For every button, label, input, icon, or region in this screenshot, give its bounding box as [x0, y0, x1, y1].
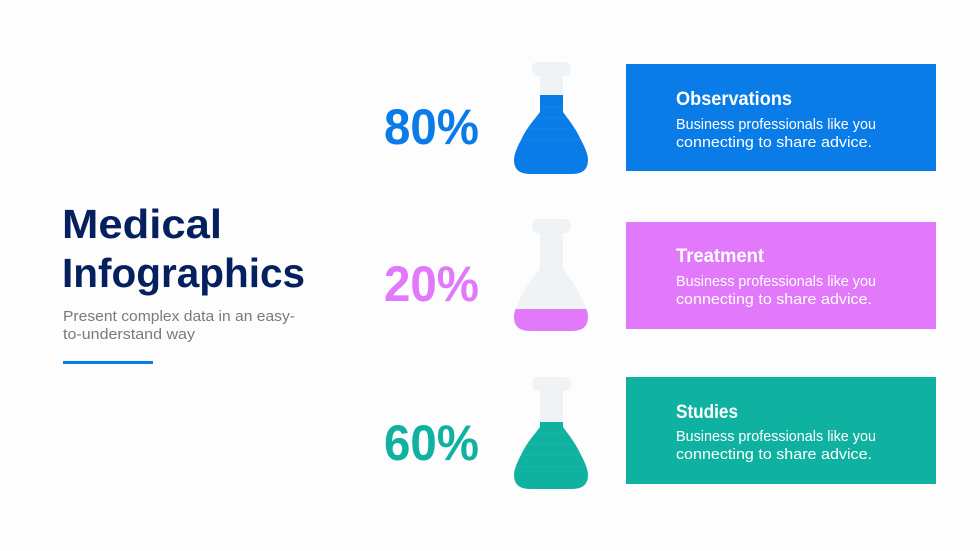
- card body: Business professionals like you: [676, 429, 876, 445]
- icon: blue flask 80%: [514, 62, 588, 174]
- heading: Medical Infographics: Medical: [62, 201, 222, 247]
- subtitle text: Present complex data in an easy-: [63, 308, 295, 325]
- card body: [676, 117, 876, 151]
- card body: [676, 274, 876, 308]
- accent underline: [63, 361, 153, 364]
- panel: Observations: [626, 64, 936, 171]
- subtitle text: [63, 308, 295, 343]
- card body: Business professionals like you: [676, 274, 876, 290]
- card body: connecting to share advice.: [676, 292, 872, 308]
- card title: Treatment: [676, 246, 765, 267]
- heading: Medical Infographics: [62, 201, 305, 296]
- panel: Treatment: [626, 222, 936, 329]
- icon: teal flask 60%: [514, 377, 588, 489]
- percentage: 20%: 20%: [384, 256, 479, 312]
- panel: Studies: [626, 377, 936, 484]
- card body: connecting to share advice.: [676, 135, 872, 151]
- card body: connecting to share advice.: [676, 447, 872, 463]
- percentage: 80%: 80%: [384, 99, 479, 155]
- icon: pink flask 20%: [514, 219, 588, 331]
- card body: [676, 429, 876, 463]
- card title: Observations: [676, 89, 792, 110]
- card title: Studies: [676, 402, 738, 423]
- subtitle text: to-understand way: [63, 326, 196, 343]
- heading: Medical Infographics: Infographics: [62, 250, 305, 296]
- percentage: 60%: 60%: [384, 415, 479, 471]
- card body: Business professionals like you: [676, 117, 876, 133]
